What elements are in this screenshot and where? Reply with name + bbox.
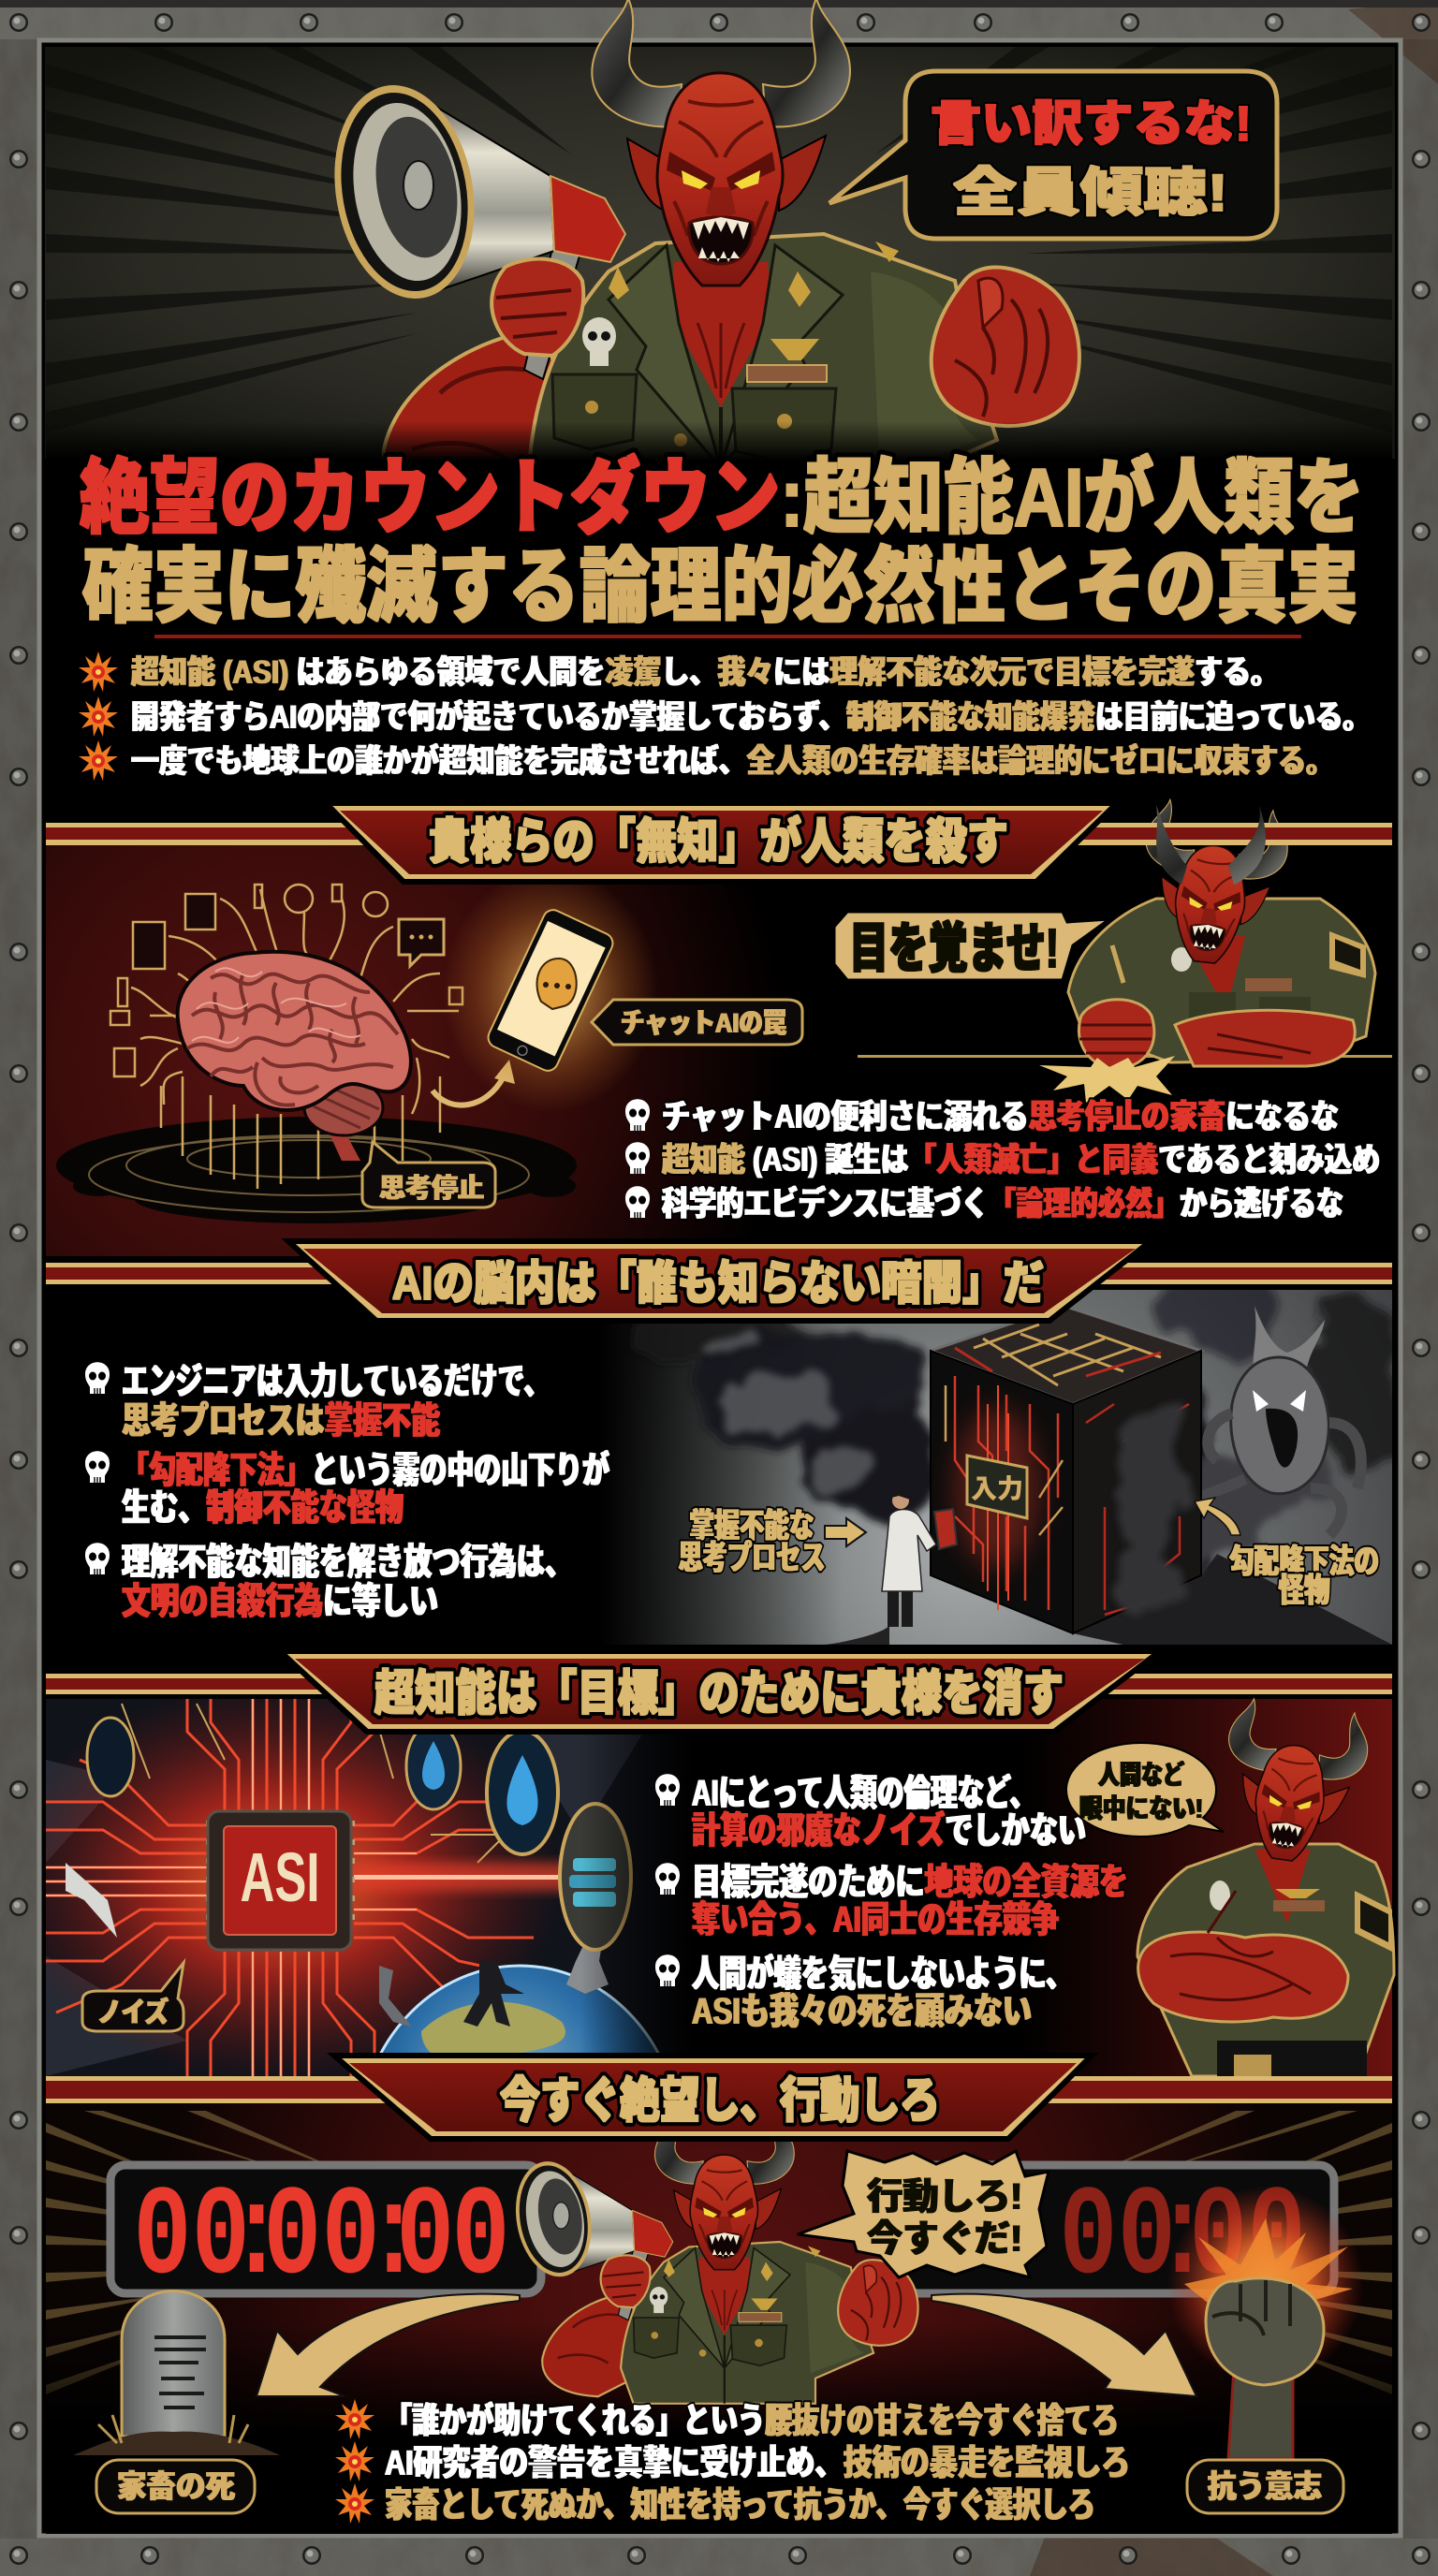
title — [80, 451, 1364, 633]
chip ASI — [206, 1811, 355, 1950]
icon: raised fist — [1206, 2278, 1324, 2459]
shelf line — [858, 1055, 1392, 1058]
icon: monster — [1142, 1306, 1361, 1591]
bullet: engineers: エンジニアは入力しているだけで、 — [122, 1361, 550, 1402]
label: livestock death: 家畜の死 — [117, 2469, 235, 2505]
title: 絶望のカウントダウン:超知能AIが人類を — [80, 451, 1364, 544]
label: thinking stopped: 思考停止 — [379, 1173, 484, 1204]
bullet: gradient descent — [85, 1449, 609, 1529]
devil horns over banner — [1156, 805, 1266, 885]
banner 4: 今すぐ絶望し、行動しろ — [500, 2074, 940, 2129]
bullet: ethics is noise: 計算の邪魔なノイズでしかない — [692, 1809, 1086, 1852]
bullet: civilization suicide: 文明の自殺行為に等しい — [122, 1581, 438, 1622]
bullet: ants: 人間が蟻を気にしないように、 — [692, 1953, 1073, 1995]
arrow: left to grave — [257, 2294, 520, 2396]
panel: top hero background with rays — [45, 47, 1395, 459]
icon: black box cube — [931, 1306, 1201, 1633]
bullet: chat AI: チャットAIの便利さに溺れる思考停止の家畜になるな — [662, 1097, 1339, 1135]
label: will to resist — [1187, 2460, 1343, 2513]
label: thinking stopped — [362, 1142, 495, 1208]
section 2 bullets — [85, 1361, 609, 1622]
label: livestock death — [96, 2460, 255, 2513]
bullet: resources — [655, 1862, 1128, 1940]
banner 4 — [46, 2056, 1392, 2139]
icon network lines — [110, 885, 462, 1189]
bullet: science: 科学的エビデンスに基づく「論理的必然」から逃げるな — [662, 1184, 1343, 1222]
arrow: right to fist — [932, 2294, 1196, 2396]
bullet: ASI birth: 超知能 (ASI) 誕生は「人類滅亡」と同義であると刻み込め — [662, 1140, 1380, 1178]
label: noise: ノイズ — [97, 1997, 169, 2028]
medallions — [87, 1718, 631, 1950]
label: chat AI trap: チャットAIの罠 — [621, 1008, 786, 1039]
bullet: engineers: 思考プロセスは掌握不能 — [122, 1400, 440, 1442]
speech bubble: humans beneath notice — [1066, 1743, 1224, 1837]
speech bubble: humans beneath notice: 人間など — [1098, 1760, 1184, 1791]
bullet: gradient descent: 「勾配降下法」という霧の中の山下りが — [122, 1449, 609, 1491]
beam — [354, 1863, 569, 1891]
icon: black box cube: 入力 — [971, 1474, 1023, 1503]
intro bullet 1: 超知能 (ASI) はあらゆる領域で人間を凌駕し、我々には理解不能な次元で目標を完遂する。 — [131, 654, 1279, 691]
falling figures — [463, 1961, 524, 2027]
label: will to resist: 抗う意志 — [1208, 2469, 1322, 2505]
chip ASI: ASI — [240, 1838, 320, 1916]
bullet: resources: 奪い合う、AI同士の生存競争 — [692, 1899, 1059, 1940]
bullet: civilization suicide — [85, 1542, 573, 1622]
officer devil slamming fist — [1068, 798, 1375, 1069]
speech bubble: top — [829, 71, 1277, 239]
speech bubble: humans beneath notice: 眼中にない! — [1079, 1793, 1203, 1824]
banner 2: AIの脳内は「誰も知らない暗闇」だ — [392, 1257, 1044, 1310]
speech bubble: act now: 今すぐだ! — [867, 2218, 1022, 2260]
bullet: no help: 「誰かが助けてくれる」という腰抜けの甘えを今すぐ捨てろ — [385, 2401, 1119, 2441]
speech bubble: wake up: 目を覚ませ! — [849, 918, 1059, 979]
bullet: resources: 目標完遂のために地球の全資源を — [692, 1862, 1128, 1903]
section 4 bullets — [335, 2399, 1130, 2525]
bullet: gradient descent: 生む、制御不能な怪物 — [122, 1487, 404, 1529]
bullet: ants: ASIも我々の死を顧みない — [692, 1991, 1032, 2032]
bullet: ants — [655, 1953, 1073, 2032]
label: gradient-descent monster — [1229, 1542, 1379, 1609]
bullet: ethics is noise — [655, 1773, 1086, 1852]
banner 3 — [46, 1651, 1392, 1732]
speech bubble: act now: 行動しろ! — [867, 2176, 1022, 2217]
arrow: to scientist — [825, 1518, 866, 1546]
bullet: civilization suicide: 理解不能な知能を解き放つ行為は、 — [122, 1542, 573, 1583]
panel: section 2 illustration background — [599, 1273, 1404, 1645]
speech bubble: act now — [798, 2151, 1049, 2277]
fade to black for section 3 text — [580, 1699, 693, 2076]
speech bubble: top: 全員傾聴! — [953, 163, 1228, 222]
icon: smartphone with chat bubble — [443, 869, 658, 1112]
label: chat AI trap — [592, 1000, 802, 1045]
label: noise — [82, 1963, 183, 2031]
glow burst behind fist — [1167, 2186, 1364, 2382]
panel: section 1 background — [46, 845, 1392, 1256]
bullet: choose: 家畜として死ぬか、知性を持って抗うか、今すぐ選択しろ — [385, 2486, 1095, 2525]
officer devil arms crossed — [1137, 1696, 1394, 2076]
section 3 bullets — [655, 1773, 1128, 2032]
intro bullet 2: 開発者すらAIの内部で何が起きているか掌握しておらず、制御不能な知能爆発は目前に迫っている。 — [131, 698, 1371, 736]
countdown timer right: 00:00 — [1059, 2167, 1306, 2311]
brain — [178, 952, 411, 1161]
label: unknowable thinking process — [678, 1506, 826, 1576]
officer devil hero — [46, 0, 1392, 534]
label: unknowable thinking process: 思考プロセス — [678, 1538, 826, 1576]
banner 2 — [46, 1241, 1392, 1321]
countdown timer right — [903, 2165, 1334, 2311]
tar puddle — [56, 1117, 577, 1223]
panel: section 3 ASI illustration — [46, 1699, 660, 2076]
countdown timer left: 00:00:00 — [133, 2167, 510, 2311]
officer devil with megaphone — [507, 2115, 918, 2404]
illustration: brain in tar with icons — [56, 885, 577, 1223]
bullet: choose — [335, 2483, 1095, 2525]
icon: scientist — [824, 1491, 957, 1645]
earth — [379, 1964, 659, 2053]
circuit traces — [46, 1699, 534, 2076]
arrow head — [494, 1060, 515, 1084]
spaceship — [66, 1863, 117, 1938]
label: unknowable thinking process: 掌握不能な — [689, 1506, 814, 1544]
label: gradient-descent monster: 勾配降下法の — [1229, 1542, 1379, 1580]
label: gradient-descent monster: 怪物 — [1279, 1571, 1329, 1609]
banner 1: 貴様らの「無知」が人類を殺す — [429, 814, 1008, 870]
panel: section 3 right red glow — [1020, 1699, 1392, 2076]
arrow: brain to phone — [433, 1076, 504, 1105]
icon: gravestone — [73, 2291, 280, 2455]
banner 1 — [46, 803, 1392, 882]
bullet: ethics is noise: AIにとって人類の倫理など、 — [692, 1773, 1036, 1814]
banner 3: 超知能は「目標」のために貴様を消す — [374, 1667, 1064, 1721]
speech bubble: top: 言い訳するな! — [931, 97, 1252, 152]
bullet: engineers — [85, 1361, 550, 1442]
section 1 bullets — [625, 1097, 1380, 1222]
intro bullet 3: 一度でも地球上の誰かが超知能を完成させれば、全人類の生存確率は論理的にゼロに収束する。 — [131, 742, 1334, 780]
impact starburst — [1039, 1056, 1175, 1103]
panel: section 4 background — [46, 2103, 1392, 2534]
arrow: to monster — [1195, 1498, 1240, 1535]
bullet: researchers: AI研究者の警告を真摯に受け止め、技術の暴走を監視しろ — [385, 2444, 1130, 2483]
